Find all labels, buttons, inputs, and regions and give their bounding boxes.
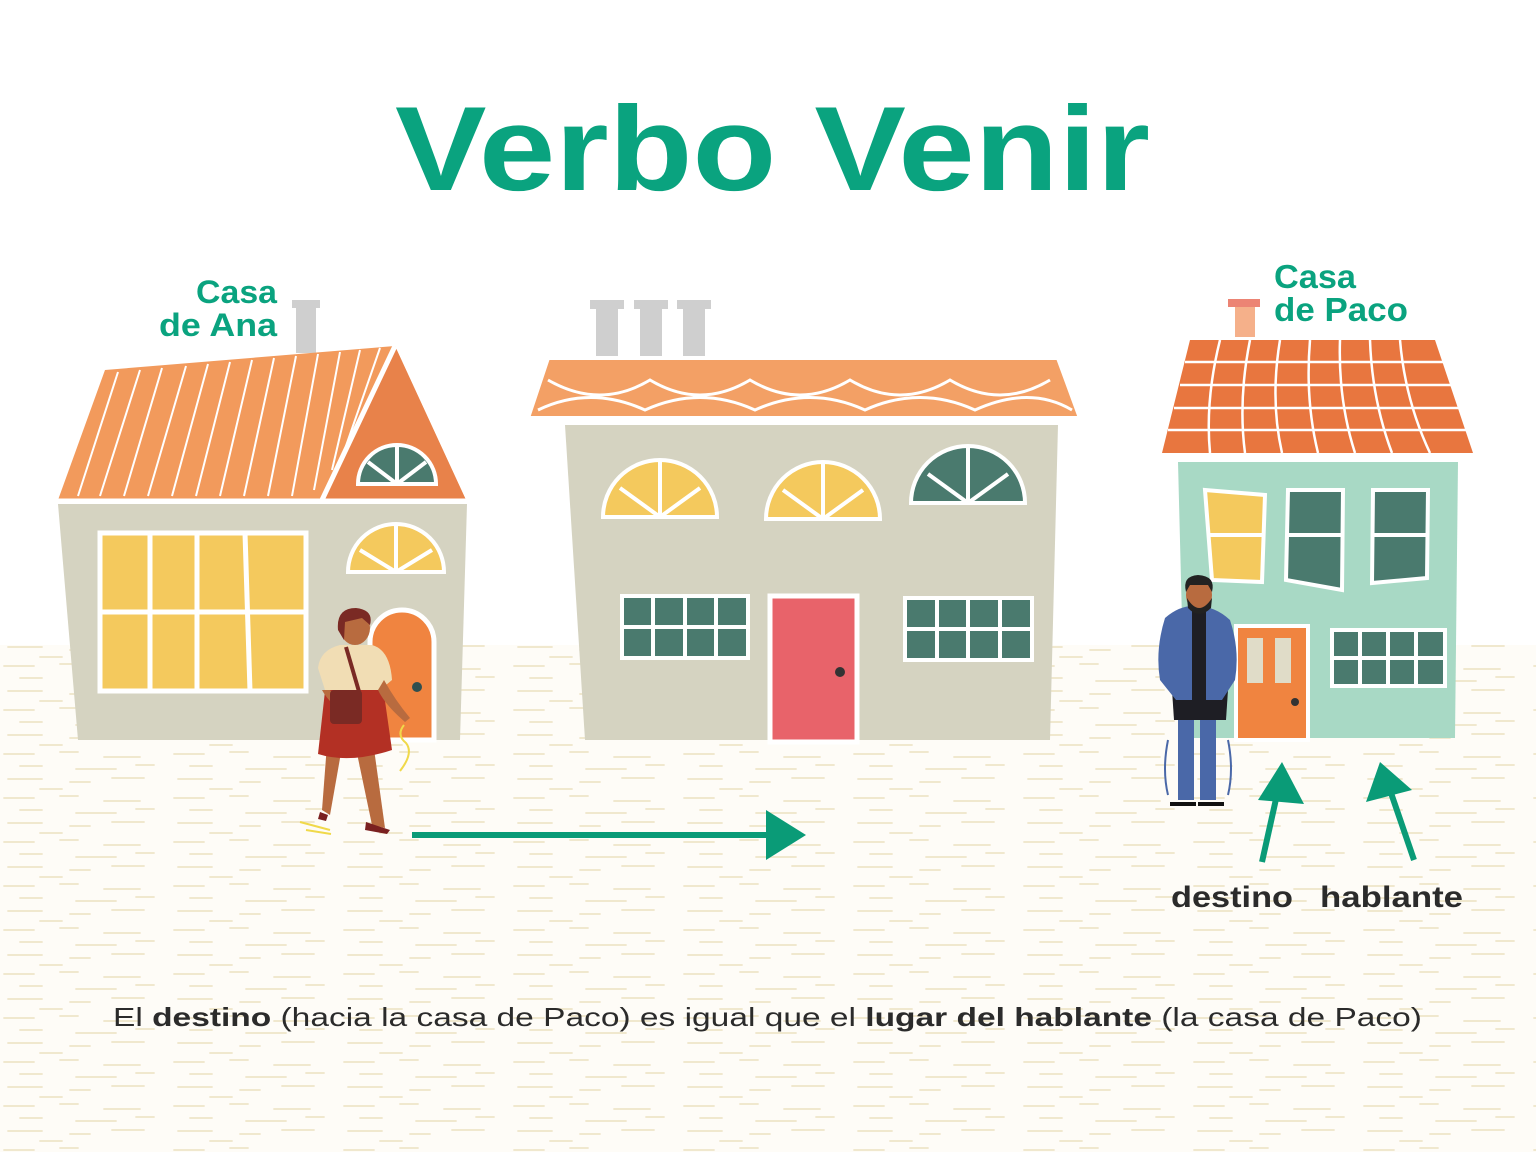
door xyxy=(770,596,857,742)
dormer window xyxy=(358,445,436,484)
big window xyxy=(100,533,306,691)
house: Casa de Paco xyxy=(1162,258,1473,740)
person: Ana walking xyxy=(300,608,410,834)
door xyxy=(370,610,434,740)
arrow: destino xyxy=(1258,762,1304,862)
wall xyxy=(58,504,467,740)
wall xyxy=(565,425,1058,740)
arrow: Ana to Paco xyxy=(412,810,806,860)
label: Casa de Ana xyxy=(159,274,277,343)
person: Paco standing xyxy=(1158,575,1237,806)
chimneys xyxy=(590,300,711,356)
chimney xyxy=(1228,299,1260,337)
wall xyxy=(1178,462,1458,738)
roof xyxy=(528,358,1080,418)
label: Casa de Ana: de Ana xyxy=(159,307,277,343)
caption: El destino (hacia la casa de Paco) es igual que el lugar del hablante (la casa de Paco) xyxy=(113,1002,1422,1032)
ground texture xyxy=(0,645,1536,1152)
label: destino: destino xyxy=(1171,881,1293,914)
house: middle xyxy=(528,300,1080,742)
arched windows upper xyxy=(603,446,1025,519)
title: Verbo Venir xyxy=(395,82,1150,216)
arrow: hablante xyxy=(1366,762,1414,860)
label: Casa de Paco: Casa xyxy=(1274,258,1357,295)
label: Casa de Paco: de Paco xyxy=(1274,291,1408,328)
label: hablante: hablante xyxy=(1320,881,1463,914)
door xyxy=(1236,626,1308,740)
windows xyxy=(1205,490,1445,686)
chimney xyxy=(292,300,320,353)
roof xyxy=(1162,340,1473,453)
roof xyxy=(58,346,466,501)
lower windows xyxy=(622,596,1032,660)
house: Casa de Ana xyxy=(58,274,467,740)
semicircle window xyxy=(348,524,444,572)
label: Casa de Ana: Casa xyxy=(196,274,277,310)
label: Casa de Paco xyxy=(1274,258,1408,328)
